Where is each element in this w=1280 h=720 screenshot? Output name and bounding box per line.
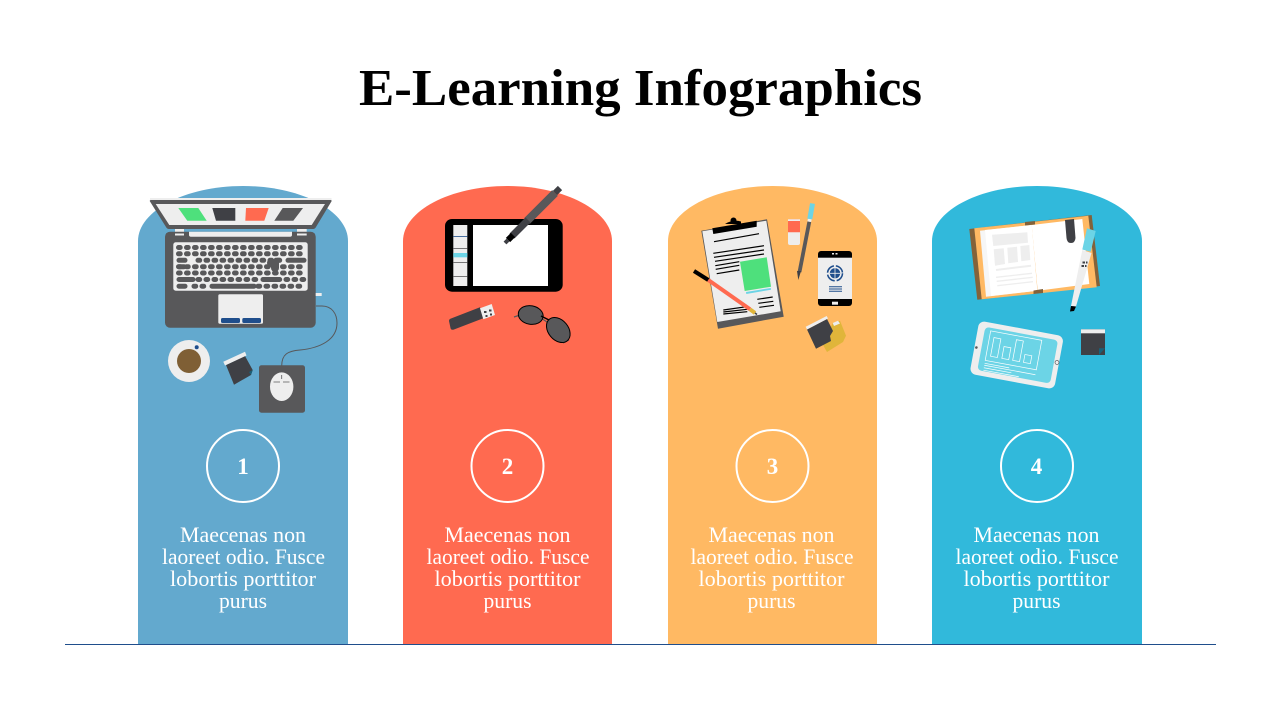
step 4 number badge (1001, 430, 1073, 502)
icon: stylus pen (505, 188, 560, 243)
step 4 number badge: 4 (1031, 454, 1043, 479)
icon: marker pen (1070, 228, 1096, 312)
panel: step 4 background (932, 186, 1142, 644)
step 4 text: lobortis porttitor (964, 566, 1110, 591)
icon: sunglasses (514, 304, 575, 347)
step 3 number badge (736, 430, 808, 502)
step 3 text: lobortis porttitor (698, 566, 845, 591)
step 4 text (956, 522, 1118, 613)
step 1 text (162, 522, 325, 613)
icon: note (1081, 329, 1105, 355)
icon: bookmark (1065, 219, 1076, 243)
step 4 text: purus (1012, 588, 1060, 613)
step 1 text: Maecenas non (180, 522, 306, 547)
step 2 text: purus (484, 588, 532, 613)
icon: pencil (694, 271, 757, 314)
icon: sticky notes (806, 316, 846, 352)
step 2 number badge: 2 (502, 454, 513, 479)
step 1 text: lobortis porttitor (170, 566, 317, 591)
icon: open planner (969, 215, 1100, 300)
icon: laptop (150, 198, 332, 328)
title: E-Learning Infographics (359, 60, 922, 117)
step 4 text: Maecenas non (974, 522, 1100, 547)
icon: notebook (223, 352, 253, 385)
step 1 text: purus (219, 588, 267, 613)
icon: USB drive (449, 304, 495, 330)
panel: step 2 background (403, 186, 612, 644)
step 3 number badge: 3 (767, 454, 778, 479)
step 3 text: purus (748, 588, 796, 613)
panel: step 3 background (668, 186, 877, 644)
baseline rule (65, 644, 1216, 645)
icon: eraser (788, 219, 800, 245)
step 1 number badge: 1 (237, 454, 249, 479)
step 3 text: laoreet odio. Fusce (690, 544, 854, 569)
step 3 text (690, 522, 854, 613)
icon: tablet with chart (969, 321, 1064, 389)
icon: mouse pad and mouse (259, 365, 305, 413)
step 1 text: laoreet odio. Fusce (162, 544, 325, 569)
step 2 text: Maecenas non (444, 522, 570, 547)
icon: mouse cable (282, 306, 337, 366)
icon: pen (797, 204, 812, 280)
icon: coffee cup (168, 340, 210, 382)
panel: step 1 background (138, 186, 348, 644)
step 3 text: Maecenas non (708, 522, 834, 547)
step 2 text: lobortis porttitor (434, 566, 581, 591)
step 4 text: laoreet odio. Fusce (956, 544, 1118, 569)
step 2 number badge (472, 430, 544, 502)
step 1 number badge (207, 430, 279, 502)
step 2 text (426, 522, 590, 613)
icon: clipboard with paper (701, 218, 784, 329)
icon: smartphone (818, 251, 852, 306)
icon: drawing tablet (445, 219, 563, 292)
step 2 text: laoreet odio. Fusce (426, 544, 590, 569)
